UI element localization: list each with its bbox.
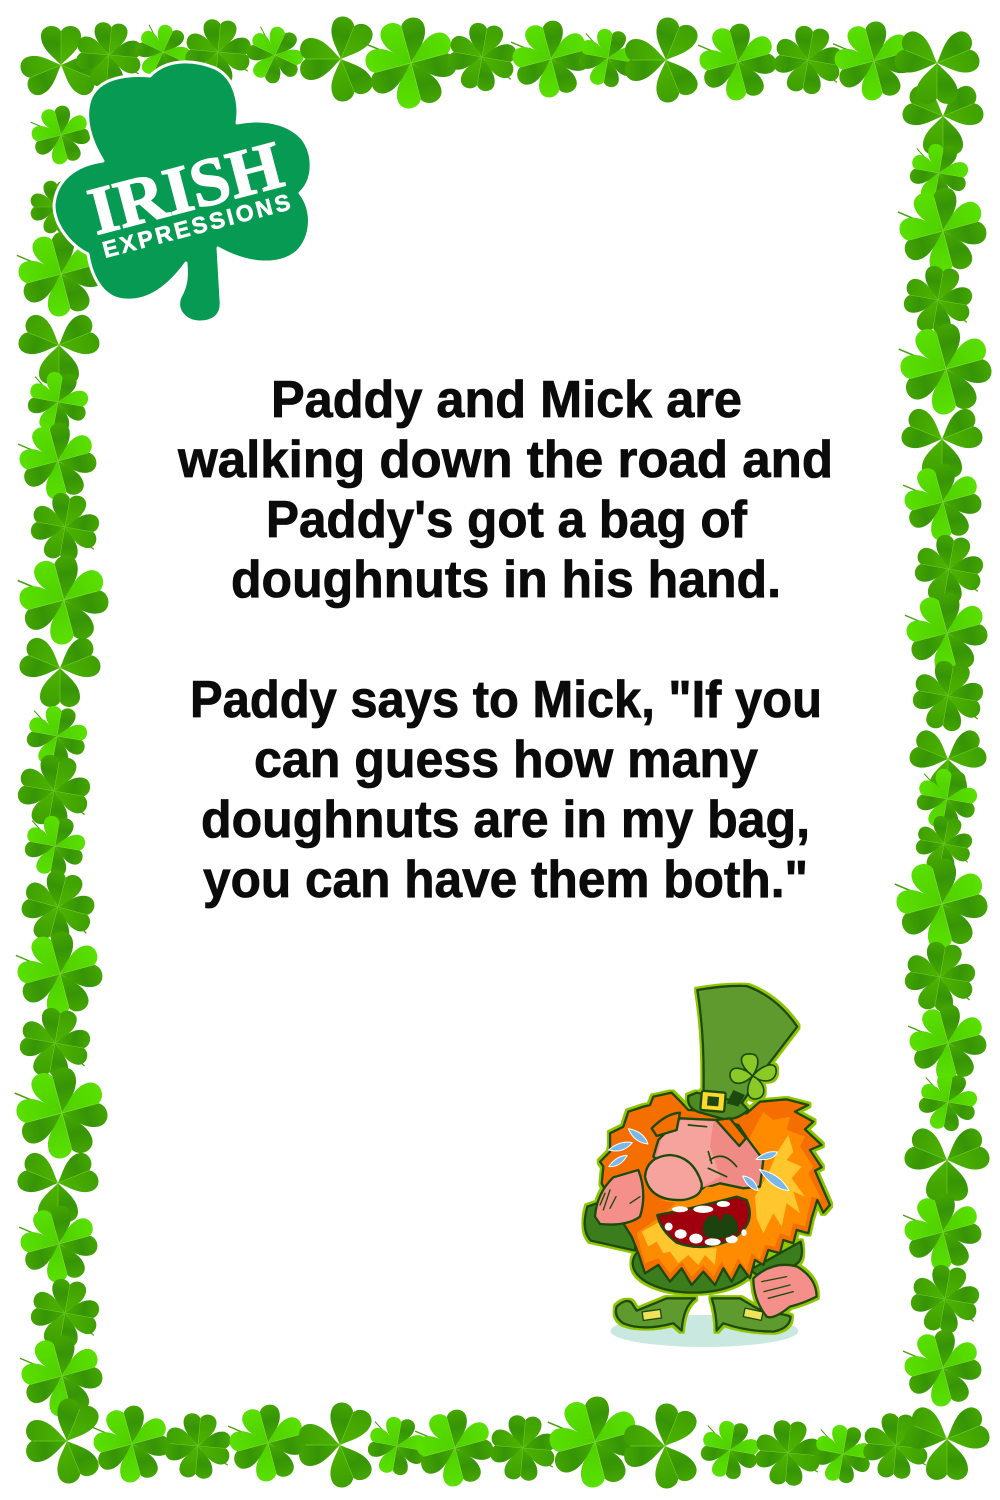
logo word: EXPRESSIONS: EXPRESSIONS [100, 189, 293, 263]
joke line 8: you can have them both." [203, 851, 808, 909]
joke line 4: doughnuts in his hand. [231, 551, 781, 609]
hat buckle hole [707, 1096, 719, 1106]
logo: Irish Expressions shamrock [54, 62, 311, 322]
illustration: crying-laughing leprechaun [585, 986, 830, 1347]
mouth [657, 1197, 750, 1247]
hand creases [600, 1190, 640, 1210]
beard yellow layer [642, 1135, 805, 1265]
shamrock border: bottom row [26, 1388, 993, 1496]
sleeves [585, 1203, 802, 1287]
shamrock border: right column [888, 83, 1000, 1413]
joke line 2: walking down the road and [177, 431, 833, 489]
right eyebrow [716, 1118, 746, 1146]
eye creases [688, 1125, 737, 1177]
left eyebrow [652, 1113, 680, 1136]
hat crown [697, 986, 797, 1103]
joke line 3: Paddy's got a bag of [266, 491, 748, 549]
throat [703, 1213, 738, 1239]
body [633, 1234, 754, 1293]
raised hand [595, 1170, 643, 1225]
nose [645, 1155, 702, 1200]
lowered hand [753, 1265, 817, 1317]
tears [609, 1129, 789, 1191]
joke line 7: doughnuts are in my bag, [201, 791, 810, 849]
joke line 1: Paddy and Mick are [271, 371, 742, 429]
hat buckle [700, 1091, 726, 1112]
shamrock border: left column [8, 100, 116, 1424]
logo word: IRISH: IRISH [81, 126, 290, 250]
hat brim [688, 1093, 748, 1119]
shoes [616, 1298, 791, 1332]
joke line 5: Paddy says to Mick, "If you [190, 671, 822, 729]
hat ribbon [727, 1090, 745, 1107]
leprechaun figure [585, 986, 830, 1332]
beard lighter layer [637, 1112, 822, 1277]
joke text [177, 371, 833, 909]
forehead highlight [657, 1120, 720, 1190]
teeth [665, 1201, 747, 1246]
ground shadow [610, 1315, 798, 1347]
shamrock on hat [730, 1054, 776, 1099]
moustache under nose [660, 1187, 747, 1205]
lowered hand creases [762, 1277, 793, 1298]
beard and hair [600, 1093, 830, 1285]
shoe buckles [642, 1308, 763, 1321]
shamrock border: top row [17, 9, 983, 117]
joke line 6: can guess how many [254, 731, 758, 789]
logo shamrock shape [54, 62, 311, 322]
face [653, 1118, 763, 1192]
